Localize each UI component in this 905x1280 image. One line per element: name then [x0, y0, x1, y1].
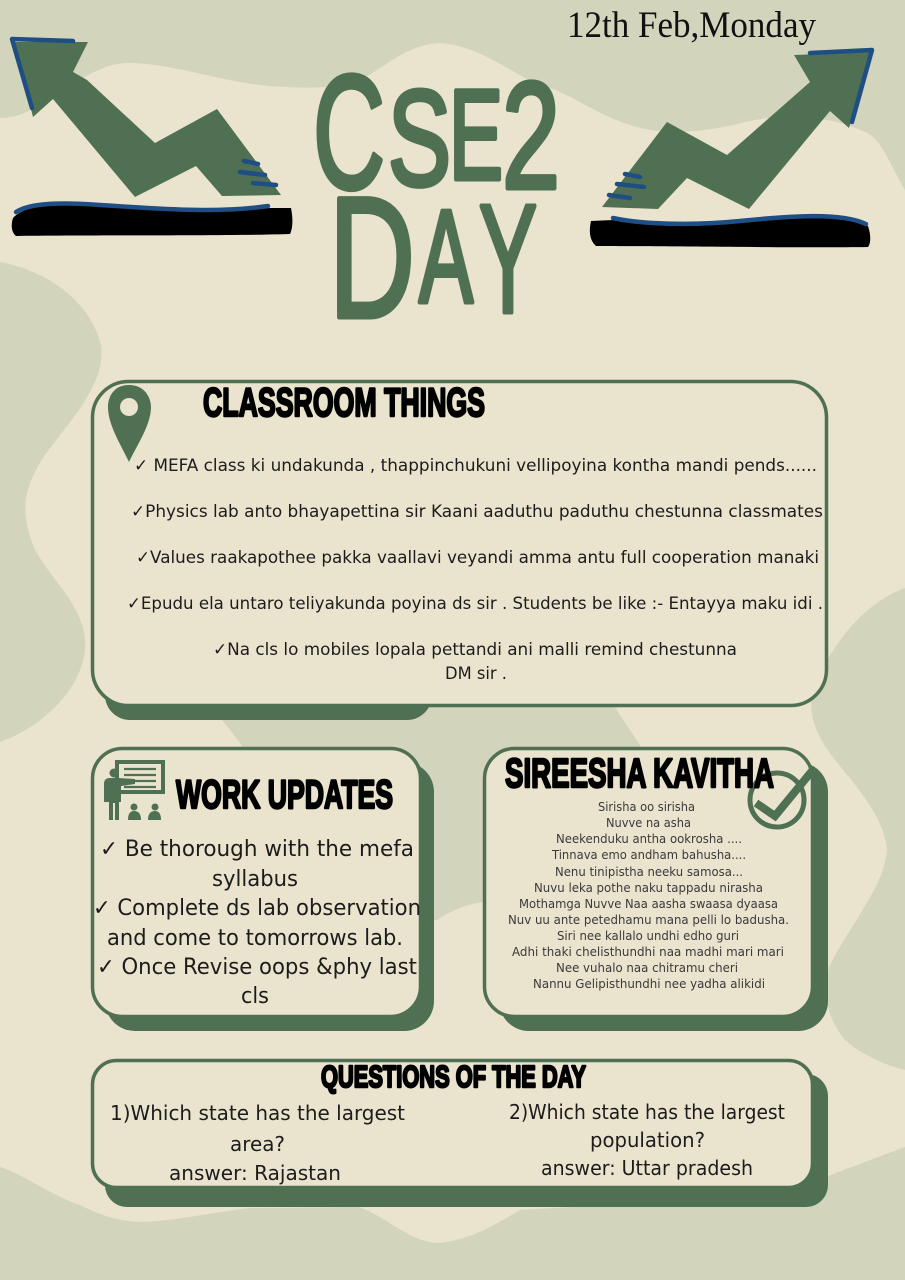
- text: poem: Sirisha oo sirisha: [598, 800, 695, 814]
- panel: classroom things: [92, 381, 826, 720]
- text: classroom list: ✓Epudu ela untaro teliyakunda poyina ds sir . Students be like :- Entayya maku idi .: [127, 594, 823, 614]
- text: question 1: area?: [230, 1132, 285, 1156]
- text: classroom list: ✓Na cls lo mobiles lopala pettandi ani malli remind chestunna: [213, 640, 737, 660]
- panel: sireesha kavitha: [484, 748, 828, 1031]
- text: poem: Neekenduku antha ookrosha ....: [556, 832, 742, 846]
- heading: sireesha kavitha: SIREESHA KAVITHA: [505, 750, 774, 796]
- text: work list: ✓ Once Revise oops &phy last: [97, 955, 417, 980]
- title: CSE2 DAY: S: [388, 62, 451, 214]
- title: CSE2 DAY: D: [329, 162, 415, 354]
- text: question 1: answer: Rajastan: [169, 1161, 341, 1185]
- panel: questions of the day: [92, 1059, 828, 1207]
- text: poem: Tinnava emo andham bahusha....: [551, 848, 746, 862]
- text: work list: cls: [241, 984, 269, 1009]
- text: poem: Nee vuhalo naa chitramu cheri: [556, 961, 738, 975]
- text: classroom list: DM sir .: [445, 664, 507, 684]
- title: CSE2 DAY: 2: [502, 51, 560, 221]
- text: poem: Nenu tinipistha neeku samosa...: [555, 865, 743, 879]
- text: poem: Adhi thaki chelisthundhi naa madhi mari mari: [512, 945, 784, 959]
- text: classroom list: ✓Values raakapothee pakka vaallavi veyandi amma antu full cooperation manaki: [136, 548, 819, 568]
- text: poem: Nuv uu ante petedhamu mana pelli lo badusha.: [508, 913, 789, 927]
- arrow: right: [590, 50, 872, 247]
- heading: work updates: WORK UPDATES: [176, 773, 393, 817]
- text: poem: Siri nee kallalo undhi edho guri: [557, 929, 739, 943]
- text: classroom list: [127, 456, 823, 684]
- text: question 2: population?: [590, 1128, 705, 1152]
- text: question 1: 1)Which state has the largest: [110, 1101, 405, 1125]
- text: poem: Mothamga Nuvve Naa aasha swaasa dyaasa: [519, 897, 778, 911]
- heading: questions of the day: QUESTIONS OF THE DAY: [321, 1059, 586, 1094]
- text: work list: [93, 837, 421, 1009]
- title: CSE2 DAY: C: [313, 42, 385, 223]
- text: work list: ✓ Be thorough with the mefa: [100, 837, 414, 862]
- icon: location pin: [108, 385, 151, 462]
- text: question 2: answer: Uttar pradesh: [541, 1156, 753, 1180]
- text: poem: Nannu Gelipisthundhi nee yadha alikidi: [533, 977, 765, 991]
- arrow: left: [12, 39, 292, 236]
- text: poem: [508, 800, 789, 991]
- panel: work updates: [92, 748, 434, 1031]
- text: question 2: 2)Which state has the largest: [509, 1100, 785, 1124]
- icon: teacher at board: [104, 762, 163, 820]
- text: work list: syllabus: [212, 867, 298, 892]
- text: question 2: [509, 1100, 785, 1180]
- icon: check circle: [750, 771, 812, 827]
- text: classroom list: ✓ MEFA class ki undakunda , thappinchukuni vellipoyina kontha mandi pends......: [134, 456, 817, 476]
- text: work list: ✓ Complete ds lab observation: [93, 896, 421, 921]
- title: CSE2 DAY: Y: [479, 173, 537, 345]
- title: CSE2 DAY: A: [419, 183, 473, 330]
- title: CSE2 DAY: [313, 42, 560, 354]
- text: work list: and come to tomorrows lab.: [107, 926, 403, 951]
- text: classroom list: ✓Physics lab anto bhayapettina sir Kaani aaduthu paduthu chestunna classmates: [131, 502, 823, 522]
- text: poem: Nuvve na asha: [606, 816, 691, 830]
- heading: classroom things: CLASSROOM THINGS: [203, 381, 485, 425]
- title: CSE2 DAY: E: [449, 64, 503, 207]
- text: poem: Nuvu leka pothe naku tappadu nirasha: [534, 881, 763, 895]
- date: 12th Feb,Monday: [567, 5, 816, 46]
- text: question 1: [110, 1101, 405, 1185]
